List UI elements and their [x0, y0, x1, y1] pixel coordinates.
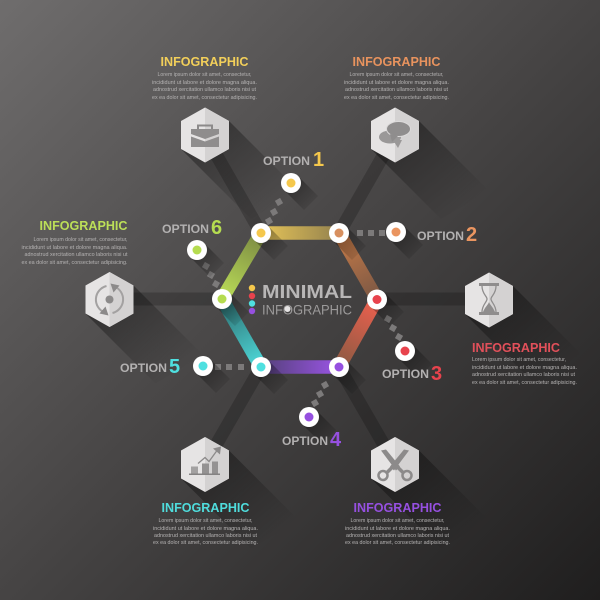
center title: [249, 281, 352, 318]
text block: top right: adnostrud xercitation ullamco laboris nisi ut: [345, 87, 448, 93]
text block: top right: incididunt ut labore et dolore magna aliqua.: [344, 80, 449, 86]
text block: left: incididunt ut labore et dolore magna aliqua.: [22, 245, 128, 251]
option labels: [120, 149, 477, 451]
option labels: OPTION: [263, 154, 310, 168]
center title: MINIMAL: [262, 281, 352, 302]
text block: top right: ex ea dolor sit amet, consectetur adipisicing.: [344, 95, 449, 101]
option labels: OPTION: [382, 367, 429, 381]
text block: top right: [344, 55, 449, 101]
text block: bottom left: [153, 501, 258, 546]
text block: left: Lorem ipsum dolor sit amet, consectetur,: [34, 237, 128, 243]
text block: right: Lorem ipsum dolor sit amet, consectetur,: [472, 357, 566, 363]
option labels: 6: [211, 217, 222, 239]
text block: right: ex ea dolor sit amet, consectetur adipisicing.: [472, 380, 577, 386]
option labels: 1: [313, 149, 324, 171]
long shadows of hexagons: [86, 121, 583, 548]
text block: top left: incididunt ut labore et dolore magna aliqua.: [152, 80, 257, 86]
text block: right: incididunt ut labore et dolore magna aliqua.: [472, 365, 577, 371]
text block: bottom right: Lorem ipsum dolor sit amet, consectetur,: [350, 518, 445, 524]
option labels: OPTION: [282, 434, 328, 448]
option labels: 4: [330, 429, 342, 451]
text block: bottom right: INFOGRAPHIC: [354, 501, 442, 515]
text block: bottom left: adnostrud xercitation ullamco laboris nisi ut: [154, 533, 257, 539]
option labels: OPTION: [417, 229, 464, 243]
text block: bottom right: ex ea dolor sit amet, consectetur adipisicing.: [345, 540, 450, 546]
text block: top left: Lorem ipsum dolor sit amet, consectetur,: [158, 72, 252, 78]
text block: top left: INFOGRAPHIC: [160, 55, 248, 69]
connector bands: [109, 135, 489, 464]
text block: top left: adnostrud xercitation ullamco laboris nisi ut: [153, 87, 256, 93]
hexagon: growth chart: [181, 437, 229, 492]
text block: right: adnostrud xercitation ullamco laboris nisi ut: [472, 372, 575, 378]
text block: left: INFOGRAPHIC: [40, 219, 128, 233]
option labels: OPTION: [162, 222, 209, 236]
option labels: OPTION: [120, 361, 167, 375]
hexagon: briefcase: [181, 108, 229, 162]
text block: top right: INFOGRAPHIC: [352, 55, 440, 69]
text block: bottom right: adnostrud xercitation ullamco laboris nisi ut: [346, 533, 449, 539]
dashed links: [202, 198, 403, 407]
hexagon ring: [222, 233, 377, 367]
text block: bottom left: ex ea dolor sit amet, consectetur adipisicing.: [153, 540, 258, 546]
text block: bottom right: [345, 501, 450, 546]
text block: bottom left: Lorem ipsum dolor sit amet, consectetur,: [158, 518, 253, 524]
text block: top left: [152, 55, 257, 101]
text block: left: [22, 219, 128, 266]
text block: top left: ex ea dolor sit amet, consectetur adipisicing.: [152, 95, 257, 101]
text block: left: adnostrud xercitation ullamco laboris nisi ut: [24, 252, 128, 258]
text block: bottom right: incididunt ut labore et dolore magna aliqua.: [345, 526, 450, 532]
text block: bottom left: incididunt ut labore et dolore magna aliqua.: [153, 526, 258, 532]
option labels: 5: [169, 356, 180, 378]
hexagon: scissors: [371, 437, 419, 492]
text block: left: ex ea dolor sit amet, consectetur adipisicing.: [22, 260, 128, 266]
hexagon: speech bubbles: [371, 108, 419, 162]
hexagon: hourglass: [465, 272, 513, 328]
option labels: 2: [466, 224, 477, 246]
ring nodes: [187, 173, 415, 427]
node shadows: [190, 176, 432, 444]
text block: top right: Lorem ipsum dolor sit amet, consectetur,: [350, 72, 444, 78]
text block: bottom left: INFOGRAPHIC: [162, 501, 250, 515]
text block: right: [472, 341, 577, 386]
center title: INFOGRAPHIC: [262, 302, 352, 318]
hexagon: refresh: [86, 272, 134, 327]
option labels: 3: [431, 363, 442, 385]
text block: right: INFOGRAPHIC: [472, 341, 560, 355]
